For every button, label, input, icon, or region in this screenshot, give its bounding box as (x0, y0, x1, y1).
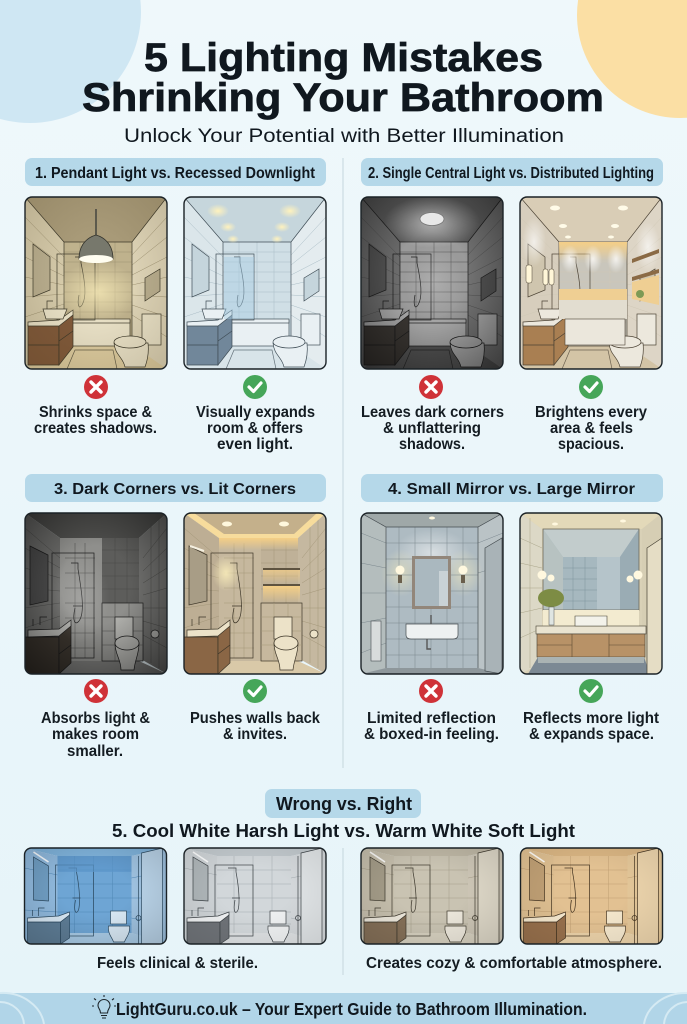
image: single central light bathroom (361, 196, 503, 369)
caption: right: area & feels (550, 420, 633, 437)
title (82, 36, 604, 120)
panel: mistake 2 (361, 158, 663, 453)
heading: mistake 4: 4. Small Mirror vs. Large Mirror (388, 481, 635, 498)
label: wrong vs right (265, 789, 421, 818)
caption: right (535, 404, 647, 453)
panel: mistake 5 (24, 789, 662, 972)
label: wrong vs right: Wrong vs. Right (276, 794, 412, 814)
caption: wrong (364, 710, 499, 743)
heading: mistake 3: 3. Dark Corners vs. Lit Corners (54, 481, 296, 498)
heading: mistake 1 (25, 158, 326, 186)
panel: mistake 1 (25, 158, 326, 453)
icon: check (579, 375, 603, 399)
icon: cross (84, 375, 108, 399)
image: neutral warm light (361, 848, 503, 944)
image: harsh white light (184, 848, 326, 944)
heading: mistake 4 (361, 474, 663, 502)
caption: wrong (361, 404, 504, 453)
caption: wrong: Leaves dark corners (361, 404, 504, 421)
caption: right: Reflects more light (523, 710, 659, 727)
decorative blue circle (0, 0, 141, 123)
caption: right: Pushes walls back (190, 710, 320, 727)
decorative yellow circle (577, 0, 687, 118)
caption: right: spacious. (558, 436, 624, 453)
icon: check (243, 375, 267, 399)
image: recessed downlights bathroom (184, 197, 326, 369)
caption: wrong: & unflattering (383, 420, 481, 437)
caption: wrong: Shrinks space & (39, 404, 152, 421)
title: 5 Lighting Mistakes (144, 36, 543, 80)
heading: mistake 3 (25, 474, 326, 502)
caption: right: even light. (217, 436, 293, 453)
caption: wrong: shadows. (399, 436, 465, 453)
icon: cross (84, 679, 108, 703)
caption: right: & expands space. (529, 726, 654, 743)
image: cool blue light (24, 848, 166, 944)
caption: wrong: Limited reflection (367, 710, 496, 727)
caption: wrong: Feels clinical & sterile. (97, 955, 258, 972)
caption: wrong (41, 710, 150, 760)
image: dark corners bathroom (25, 513, 167, 674)
centre divider lower (342, 848, 344, 975)
centre divider upper (342, 158, 344, 768)
heading: mistake 1: 1. Pendant Light vs. Recessed Downlight (35, 165, 315, 182)
heading: mistake 5: 5. Cool White Harsh Light vs. Warm White Soft Light (112, 820, 575, 841)
caption: wrong: makes room (52, 726, 139, 743)
caption: right (190, 710, 320, 743)
caption: right: & invites. (223, 726, 287, 743)
caption: right: Creates cozy & comfortable atmosphere. (366, 955, 662, 972)
icon: light bulb (92, 995, 116, 1018)
image: warm soft light (520, 848, 662, 944)
panel: mistake 3 (25, 474, 326, 760)
image: pendant light bathroom (25, 197, 167, 369)
icon: check (579, 679, 603, 703)
icon: cross (419, 375, 443, 399)
caption: wrong (34, 404, 157, 437)
subtitle: Unlock Your Potential with Better Illumination (124, 126, 564, 147)
image: distributed lighting bathroom (520, 197, 662, 369)
image: small mirror bathroom (361, 513, 503, 674)
caption: wrong: Absorbs light & (41, 710, 150, 727)
caption: right (196, 404, 315, 453)
heading: mistake 2 (361, 158, 663, 186)
caption: right (523, 710, 659, 743)
caption: wrong: creates shadows. (34, 420, 157, 437)
title: Shrinking Your Bathroom (82, 76, 604, 120)
footer text: LightGuru.co.uk – Your Expert Guide to Bathroom Illumination. (116, 999, 587, 1019)
caption: right: Visually expands (196, 404, 315, 421)
caption: right: Brightens every (535, 404, 647, 421)
image: lit corners bathroom (184, 513, 326, 674)
panel: mistake 4 (361, 474, 663, 743)
caption: wrong: & boxed-in feeling. (364, 726, 499, 743)
caption: right: room & offers (207, 420, 303, 437)
icon: cross (419, 679, 443, 703)
caption: wrong: smaller. (67, 743, 123, 760)
footer (0, 993, 687, 1024)
image: large mirror bathroom (520, 513, 662, 674)
icon: check (243, 679, 267, 703)
